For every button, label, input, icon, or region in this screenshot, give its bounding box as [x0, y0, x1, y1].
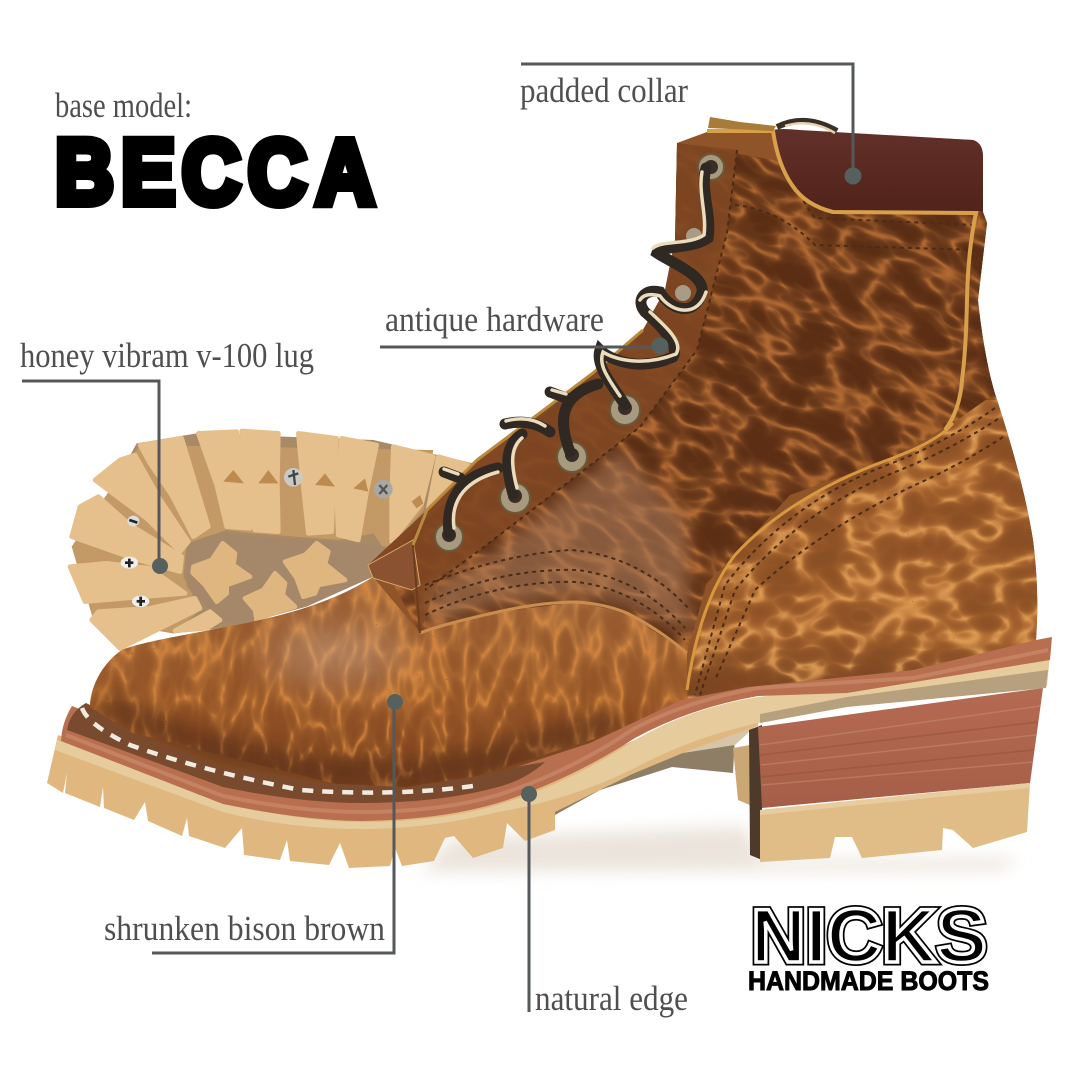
tongue top [708, 117, 776, 131]
logo: Nicks Handmade Boots: HANDMADE BOOTS [748, 966, 989, 996]
tread lugs [70, 431, 468, 648]
heel gum lug [760, 783, 1030, 862]
callout: antique hardware [380, 300, 668, 354]
callout: natural edge: natural edge [535, 979, 688, 1018]
outsole base [80, 433, 473, 633]
laces and eyelets [435, 154, 724, 551]
heel stack [758, 688, 1043, 808]
toe stitching [82, 708, 480, 793]
logo: Nicks Handmade Boots: NICKS [751, 894, 987, 979]
gusset edge [413, 330, 643, 545]
heel breast [733, 745, 752, 806]
padded collar [773, 129, 983, 212]
callout: shrunken bison brown [104, 694, 403, 953]
collar binding [707, 131, 976, 430]
screws [121, 468, 393, 607]
welt: natural edge [61, 637, 1052, 821]
top lace loop [777, 121, 837, 131]
shaft leather [394, 144, 1000, 652]
callout: padded collar: padded collar [520, 71, 688, 110]
boot: side profile [47, 117, 1052, 868]
upper leather [90, 117, 1038, 787]
lug pinch shadows [223, 470, 423, 508]
logo: Nicks Handmade Boots: NICKS [751, 894, 987, 979]
sole-side toe shadow [90, 690, 640, 787]
soft ground shadow [420, 826, 1020, 872]
title block [55, 86, 374, 224]
facing highlight [430, 450, 690, 635]
arch underside [555, 730, 735, 815]
stitched welt band [67, 703, 545, 803]
callout: natural edge [521, 786, 688, 1018]
callout: honey vibram v-100 lug [20, 336, 314, 574]
vamp toe leather [90, 578, 687, 787]
lace facing [368, 143, 737, 633]
pale midsole strip [55, 655, 1050, 829]
tongue tip [368, 540, 420, 590]
rear quarter leather [687, 395, 1038, 699]
callout: shrunken bison brown: shrunken bison brown [104, 909, 385, 948]
callout: antique hardware: antique hardware [385, 300, 604, 339]
callout: padded collar [520, 64, 862, 184]
quarter seam piping [687, 423, 953, 690]
callout: honey vibram v-100 lug: honey vibram v-100 lug [20, 336, 314, 375]
cross lugs [193, 543, 345, 620]
toe highlight [265, 629, 405, 681]
heading: BECCA: BECCA [55, 122, 374, 224]
second boot: outsole with lugs [70, 431, 473, 648]
lace facing edge [420, 602, 687, 653]
forepart gum outsole [47, 710, 758, 868]
subtitle: base model: base model: [55, 86, 192, 125]
stitching [425, 135, 1003, 695]
